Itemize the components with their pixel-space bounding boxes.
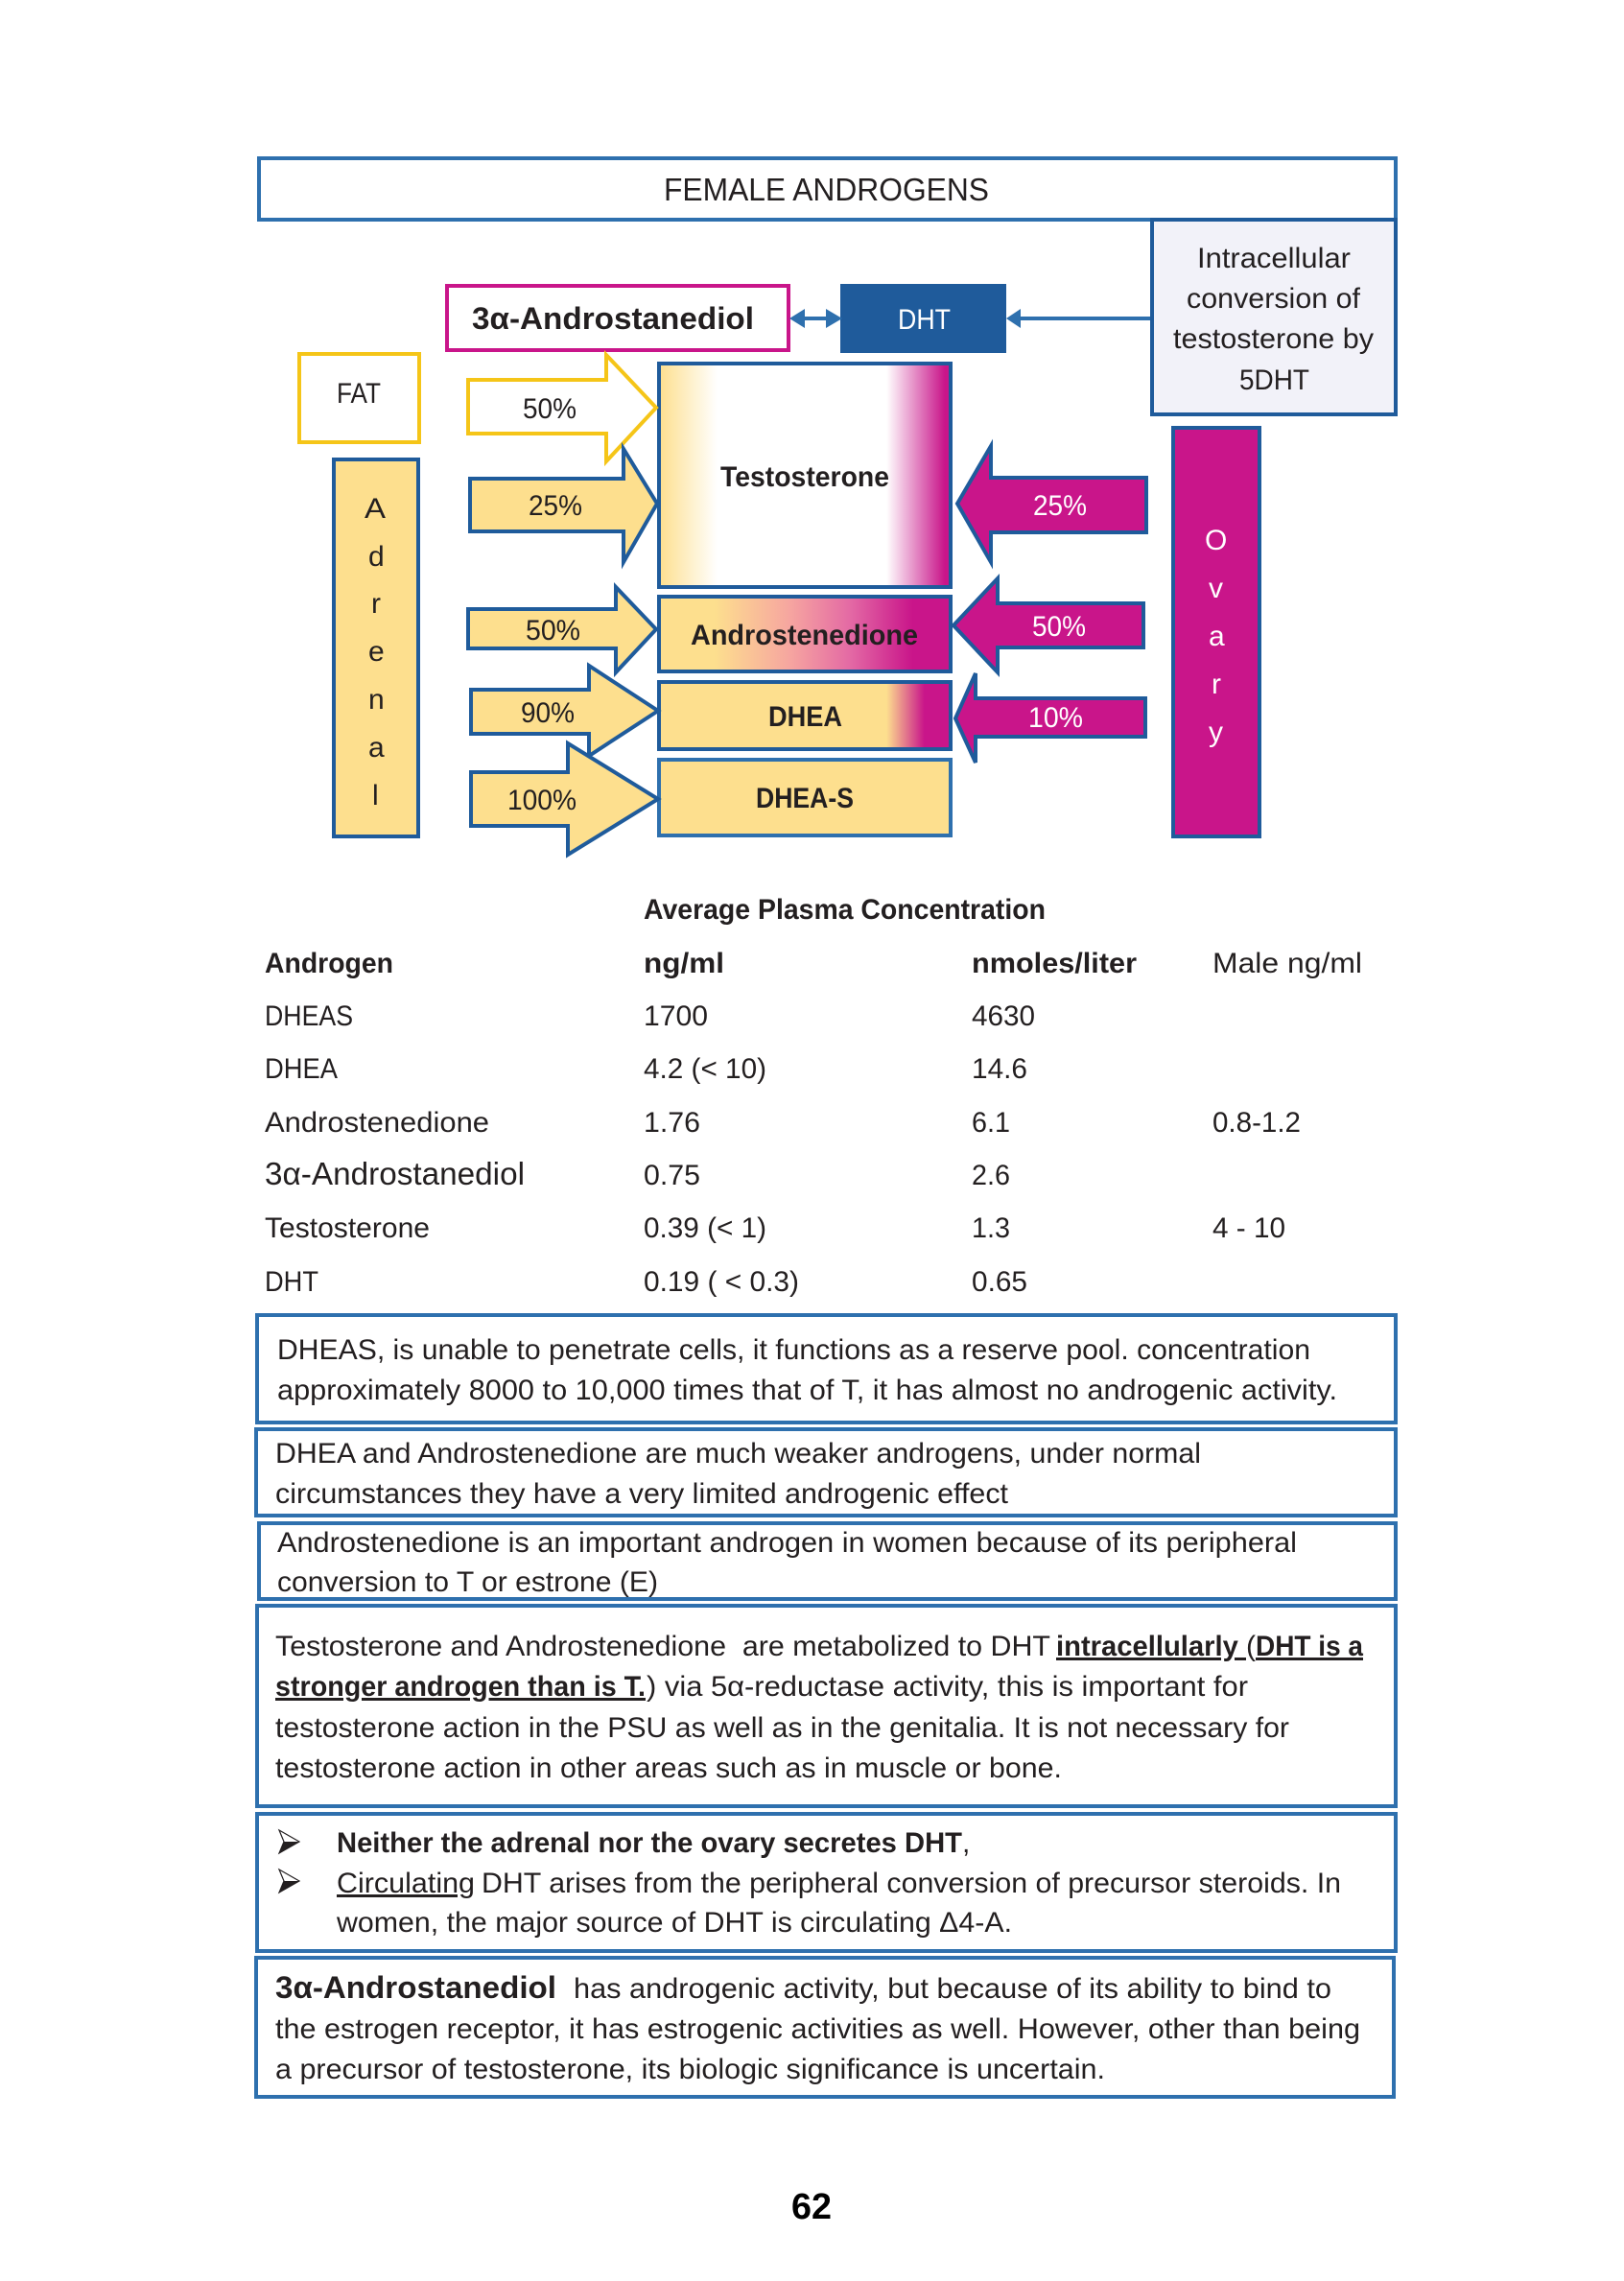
panel: intracellular conversion note: testosterone by [1173, 323, 1374, 355]
panel: ovary column: a [1209, 621, 1225, 652]
panel: DHT metabolism note: testosterone action in the PSU as well as in the genitalia. It is not necessary for [275, 1712, 1289, 1744]
arrow: adrenal 100% to DHEA-S: 100% [507, 785, 577, 816]
row: testosterone: Testosterone [265, 1212, 430, 1244]
row: androstenedione: 6.1 [972, 1107, 1010, 1139]
panel: androstanediol note: 3α-Androstanediol [275, 1970, 556, 2005]
table header row: nmoles/liter [972, 948, 1137, 979]
panel: androstanediol note: a precursor of testosterone, its biologic significance is uncertain. [275, 2054, 1105, 2085]
box: DHEA-S: DHEA-S [756, 783, 854, 814]
panel: androstanediol note: the estrogen receptor, it has estrogenic activities as well. However, other than being [275, 2013, 1360, 2045]
panel: intracellular conversion note: Intracellular [1197, 243, 1351, 274]
box: 3-alpha androstanediol: 3α-Androstanediol [472, 301, 754, 336]
panel: DHT metabolism note: DHT is a [1256, 1631, 1363, 1662]
row: testosterone [265, 1212, 1285, 1244]
panel: androstanediol note [256, 1958, 1394, 2097]
panel: intracellular conversion note: 5DHT [1239, 364, 1309, 396]
arrow: adrenal 50% to androstenedione [468, 587, 656, 672]
panel: DHEAS note: DHEAS, is unable to penetrate cells, it functions as a reserve pool. concentration [277, 1334, 1310, 1366]
arrow: adrenal 90% to DHEA: 90% [521, 697, 575, 729]
arrow: adrenal 50% to androstenedione: 50% [526, 615, 580, 647]
arrow: adrenal 100% to DHEA-S [471, 743, 658, 855]
panel: adrenal column: d [368, 541, 385, 573]
arrow: androstanediol to DHT double-headed [789, 309, 842, 328]
table heading: Average Plasma Concentration [644, 894, 1046, 926]
page number: 62 [791, 2187, 832, 2227]
row: 3-alpha androstanediol [265, 1156, 1010, 1191]
panel: ovary column [1173, 428, 1259, 836]
row: testosterone: 4 - 10 [1212, 1212, 1285, 1244]
row: DHEAS: 1700 [644, 1000, 708, 1032]
panel: DHT metabolism note: Testosterone and Androstenedione are metabolized to DHT [275, 1631, 1050, 1662]
row: 3-alpha androstanediol: 2.6 [972, 1160, 1010, 1191]
panel: androstenedione note [259, 1523, 1396, 1599]
panel: DHT metabolism note: ) via 5α-reductase activity, this is important for [647, 1671, 1248, 1703]
icon: bullet arrow two [279, 1869, 299, 1893]
panel: androstanediol note: has androgenic activity, but because of its ability to bind to [574, 1973, 1331, 2005]
panel: androstenedione note: conversion to T or estrone (E) [277, 1566, 658, 1598]
table header row: Male ng/ml [1212, 948, 1362, 979]
box: 3-alpha androstanediol [447, 286, 788, 350]
panel: intracellular conversion note [1152, 220, 1396, 414]
row: androstenedione: Androstenedione [265, 1107, 489, 1139]
box: DHT [840, 284, 1006, 353]
panel: DHT source bullets: Circulating [337, 1868, 475, 1899]
table: average plasma concentration [265, 894, 1362, 1298]
panel: DHT source bullets: , [962, 1827, 970, 1859]
panel: DHT source bullets: DHT arises from the peripheral conversion of precursor steroids. In [482, 1868, 1341, 1899]
box: androstenedione [659, 597, 951, 671]
box: DHEA: DHEA [768, 701, 842, 733]
arrow: ovary 50% to androstenedione: 50% [1032, 611, 1086, 643]
panel: androstenedione note: Androstenedione is an important androgen in women because of its peripheral [277, 1527, 1297, 1559]
row: DHEAS: DHEAS [265, 1000, 353, 1032]
row: testosterone: 0.39 (< 1) [644, 1212, 766, 1244]
panel: DHEA and androstenedione note: DHEA and Androstenedione are much weaker androgens, under normal [275, 1438, 1201, 1470]
panel: DHT source bullets [257, 1814, 1396, 1951]
panel: adrenal column: A [365, 493, 386, 525]
box: fat: FAT [337, 378, 381, 410]
row: DHT: DHT [265, 1266, 318, 1298]
title: FEMALE ANDROGENS [664, 172, 989, 207]
panel: adrenal column: r [371, 588, 381, 620]
box: fat [299, 354, 419, 442]
arrow: ovary 10% to DHEA: 10% [1028, 702, 1083, 734]
row: DHEA: DHEA [265, 1053, 338, 1085]
box: testosterone: Testosterone [720, 461, 889, 493]
title [259, 158, 1396, 220]
arrow: adrenal 25% to testosterone [470, 449, 657, 562]
table header row: Androgen [265, 948, 393, 979]
table header row: ng/ml [644, 948, 724, 979]
panel: DHEA and androstenedione note: circumstances they have a very limited androgenic effect [275, 1478, 1009, 1510]
row: DHEAS [265, 1000, 1035, 1032]
panel: DHT metabolism note: stronger androgen than is T. [275, 1671, 646, 1703]
arrow: ovary 25% to testosterone: 25% [1033, 490, 1087, 522]
row: androstenedione: 1.76 [644, 1107, 700, 1139]
table header row [265, 948, 1362, 979]
panel: ovary column: v [1209, 573, 1223, 604]
panel: DHT metabolism note: ( [1246, 1631, 1256, 1662]
row: DHEA: 4.2 (< 10) [644, 1053, 766, 1085]
row: 3-alpha androstanediol: 3α-Androstanediol [265, 1156, 525, 1191]
panel: ovary column: y [1209, 717, 1223, 748]
arrow: ovary 25% to testosterone [957, 446, 1146, 562]
panel: DHT metabolism note: testosterone action in other areas such as in muscle or bone. [275, 1752, 1062, 1784]
arrow: intracellular conversion to DHT [1006, 309, 1150, 328]
panel: ovary column: r [1212, 669, 1221, 700]
panel: DHT source bullets: women, the major source of DHT is circulating Δ4-A. [336, 1907, 1012, 1939]
row: 3-alpha androstanediol: 0.75 [644, 1160, 700, 1191]
panel: DHT metabolism note: intracellularly [1056, 1631, 1246, 1662]
panel: DHT source bullets: Neither the adrenal nor the ovary secretes DHT [337, 1827, 962, 1859]
row: androstenedione: 0.8-1.2 [1212, 1107, 1301, 1139]
arrow: ovary 10% to DHEA [955, 673, 1145, 763]
row: DHEA [265, 1053, 1027, 1085]
box: DHEA-S [659, 760, 951, 835]
icon: bullet arrow one [279, 1830, 299, 1853]
box: androstenedione: Androstenedione [691, 620, 918, 651]
arrow: fat 50% to testosterone [468, 355, 656, 461]
panel: DHEA and androstenedione note [256, 1429, 1396, 1516]
arrow: ovary 50% to androstenedione [953, 578, 1143, 672]
arrow: adrenal 25% to testosterone: 25% [529, 490, 582, 522]
panel: ovary column: O [1205, 525, 1227, 556]
panel: DHEAS note: approximately 8000 to 10,000 times that of T, it has almost no androgenic activity. [277, 1375, 1337, 1406]
box: DHEA [659, 682, 951, 749]
panel: adrenal column [334, 459, 418, 836]
arrow: fat 50% to testosterone: 50% [523, 393, 577, 425]
row: DHT: 0.19 ( < 0.3) [644, 1266, 799, 1298]
row: DHEAS: 4630 [972, 1000, 1035, 1032]
row: androstenedione [265, 1107, 1301, 1139]
row: DHT: 0.65 [972, 1266, 1027, 1298]
panel: DHEAS note [257, 1315, 1396, 1423]
panel: intracellular conversion note: conversion of [1187, 283, 1361, 315]
panel: DHT metabolism note [257, 1606, 1396, 1806]
panel: adrenal column: a [368, 732, 385, 764]
arrow: adrenal 90% to DHEA [471, 666, 658, 756]
row: testosterone: 1.3 [972, 1212, 1010, 1244]
panel: adrenal column: n [368, 684, 385, 716]
panel: adrenal column: e [368, 636, 385, 668]
box: testosterone [659, 364, 951, 587]
row: DHEA: 14.6 [972, 1053, 1027, 1085]
row: DHT [265, 1266, 1027, 1298]
box: DHT: DHT [898, 304, 951, 336]
panel: adrenal column: l [372, 780, 379, 811]
